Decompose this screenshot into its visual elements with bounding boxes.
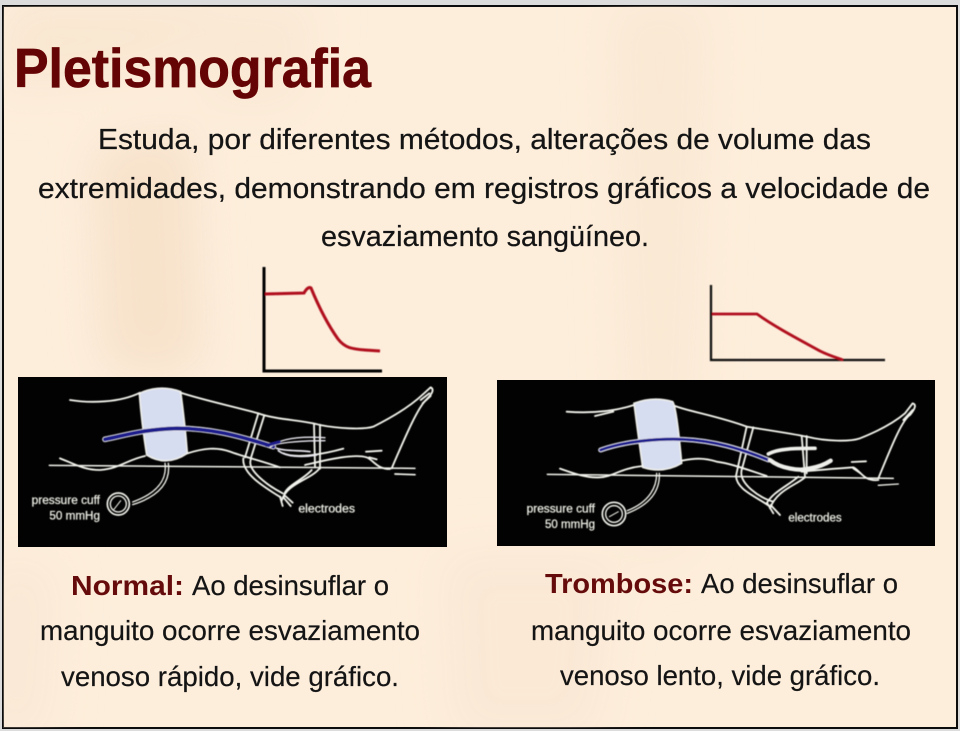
caption: normal: Ao desinsuflar o	[192, 570, 389, 601]
intro text block: Estuda, por diferentes métodos, alterações de volume das	[98, 124, 871, 156]
caption: thrombosis: venoso lento, vide gráfico.	[560, 660, 880, 691]
chart: normal fast emptying curve	[264, 267, 382, 371]
image: thrombosis leg diagram	[497, 380, 935, 546]
caption: normal: venoso rápido, vide gráfico.	[61, 661, 399, 692]
image: normal leg diagram	[18, 377, 447, 547]
label: electrodes, normal: electrodes	[298, 501, 355, 515]
title: Pletismografia	[14, 37, 371, 99]
caption: normal	[40, 570, 420, 692]
intro text block	[38, 124, 930, 253]
label: pressure cuff 50 mmHg, normal: pressure cuff	[32, 493, 101, 507]
label: pressure cuff 50 mmHg, normal: 50 mmHg	[49, 508, 100, 522]
caption: thrombosis	[531, 568, 911, 691]
label: pressure cuff 50 mmHg, thrombosis: 50 mmHg	[545, 517, 595, 531]
label: electrodes, thrombosis: electrodes	[788, 511, 842, 525]
caption: normal: manguito ocorre esvaziamento	[40, 615, 420, 646]
intro text block: extremidades, demonstrando em registros gráficos a velocidade de	[38, 173, 930, 205]
label: pressure cuff 50 mmHg, normal	[32, 493, 101, 522]
leg outline, normal	[49, 387, 433, 515]
intro text block: esvaziamento sangüíneo.	[321, 221, 649, 253]
vein, normal	[105, 428, 325, 456]
caption: thrombosis: Ao desinsuflar o	[701, 568, 898, 599]
vein and clot, thrombosis	[601, 439, 831, 470]
caption: thrombosis: manguito ocorre esvaziamento	[531, 615, 911, 646]
icon: pressure cuff, thrombosis	[634, 399, 682, 470]
leg outline, thrombosis	[547, 403, 915, 526]
label: pressure cuff 50 mmHg, thrombosis	[527, 501, 596, 531]
caption: thrombosis: Trombose:	[545, 568, 693, 599]
chart: thrombosis slow emptying curve	[711, 285, 885, 360]
label: pressure cuff 50 mmHg, thrombosis: pressure cuff	[527, 501, 596, 515]
icon: pressure cuff, normal	[139, 388, 187, 461]
caption: normal: Normal:	[71, 570, 184, 601]
